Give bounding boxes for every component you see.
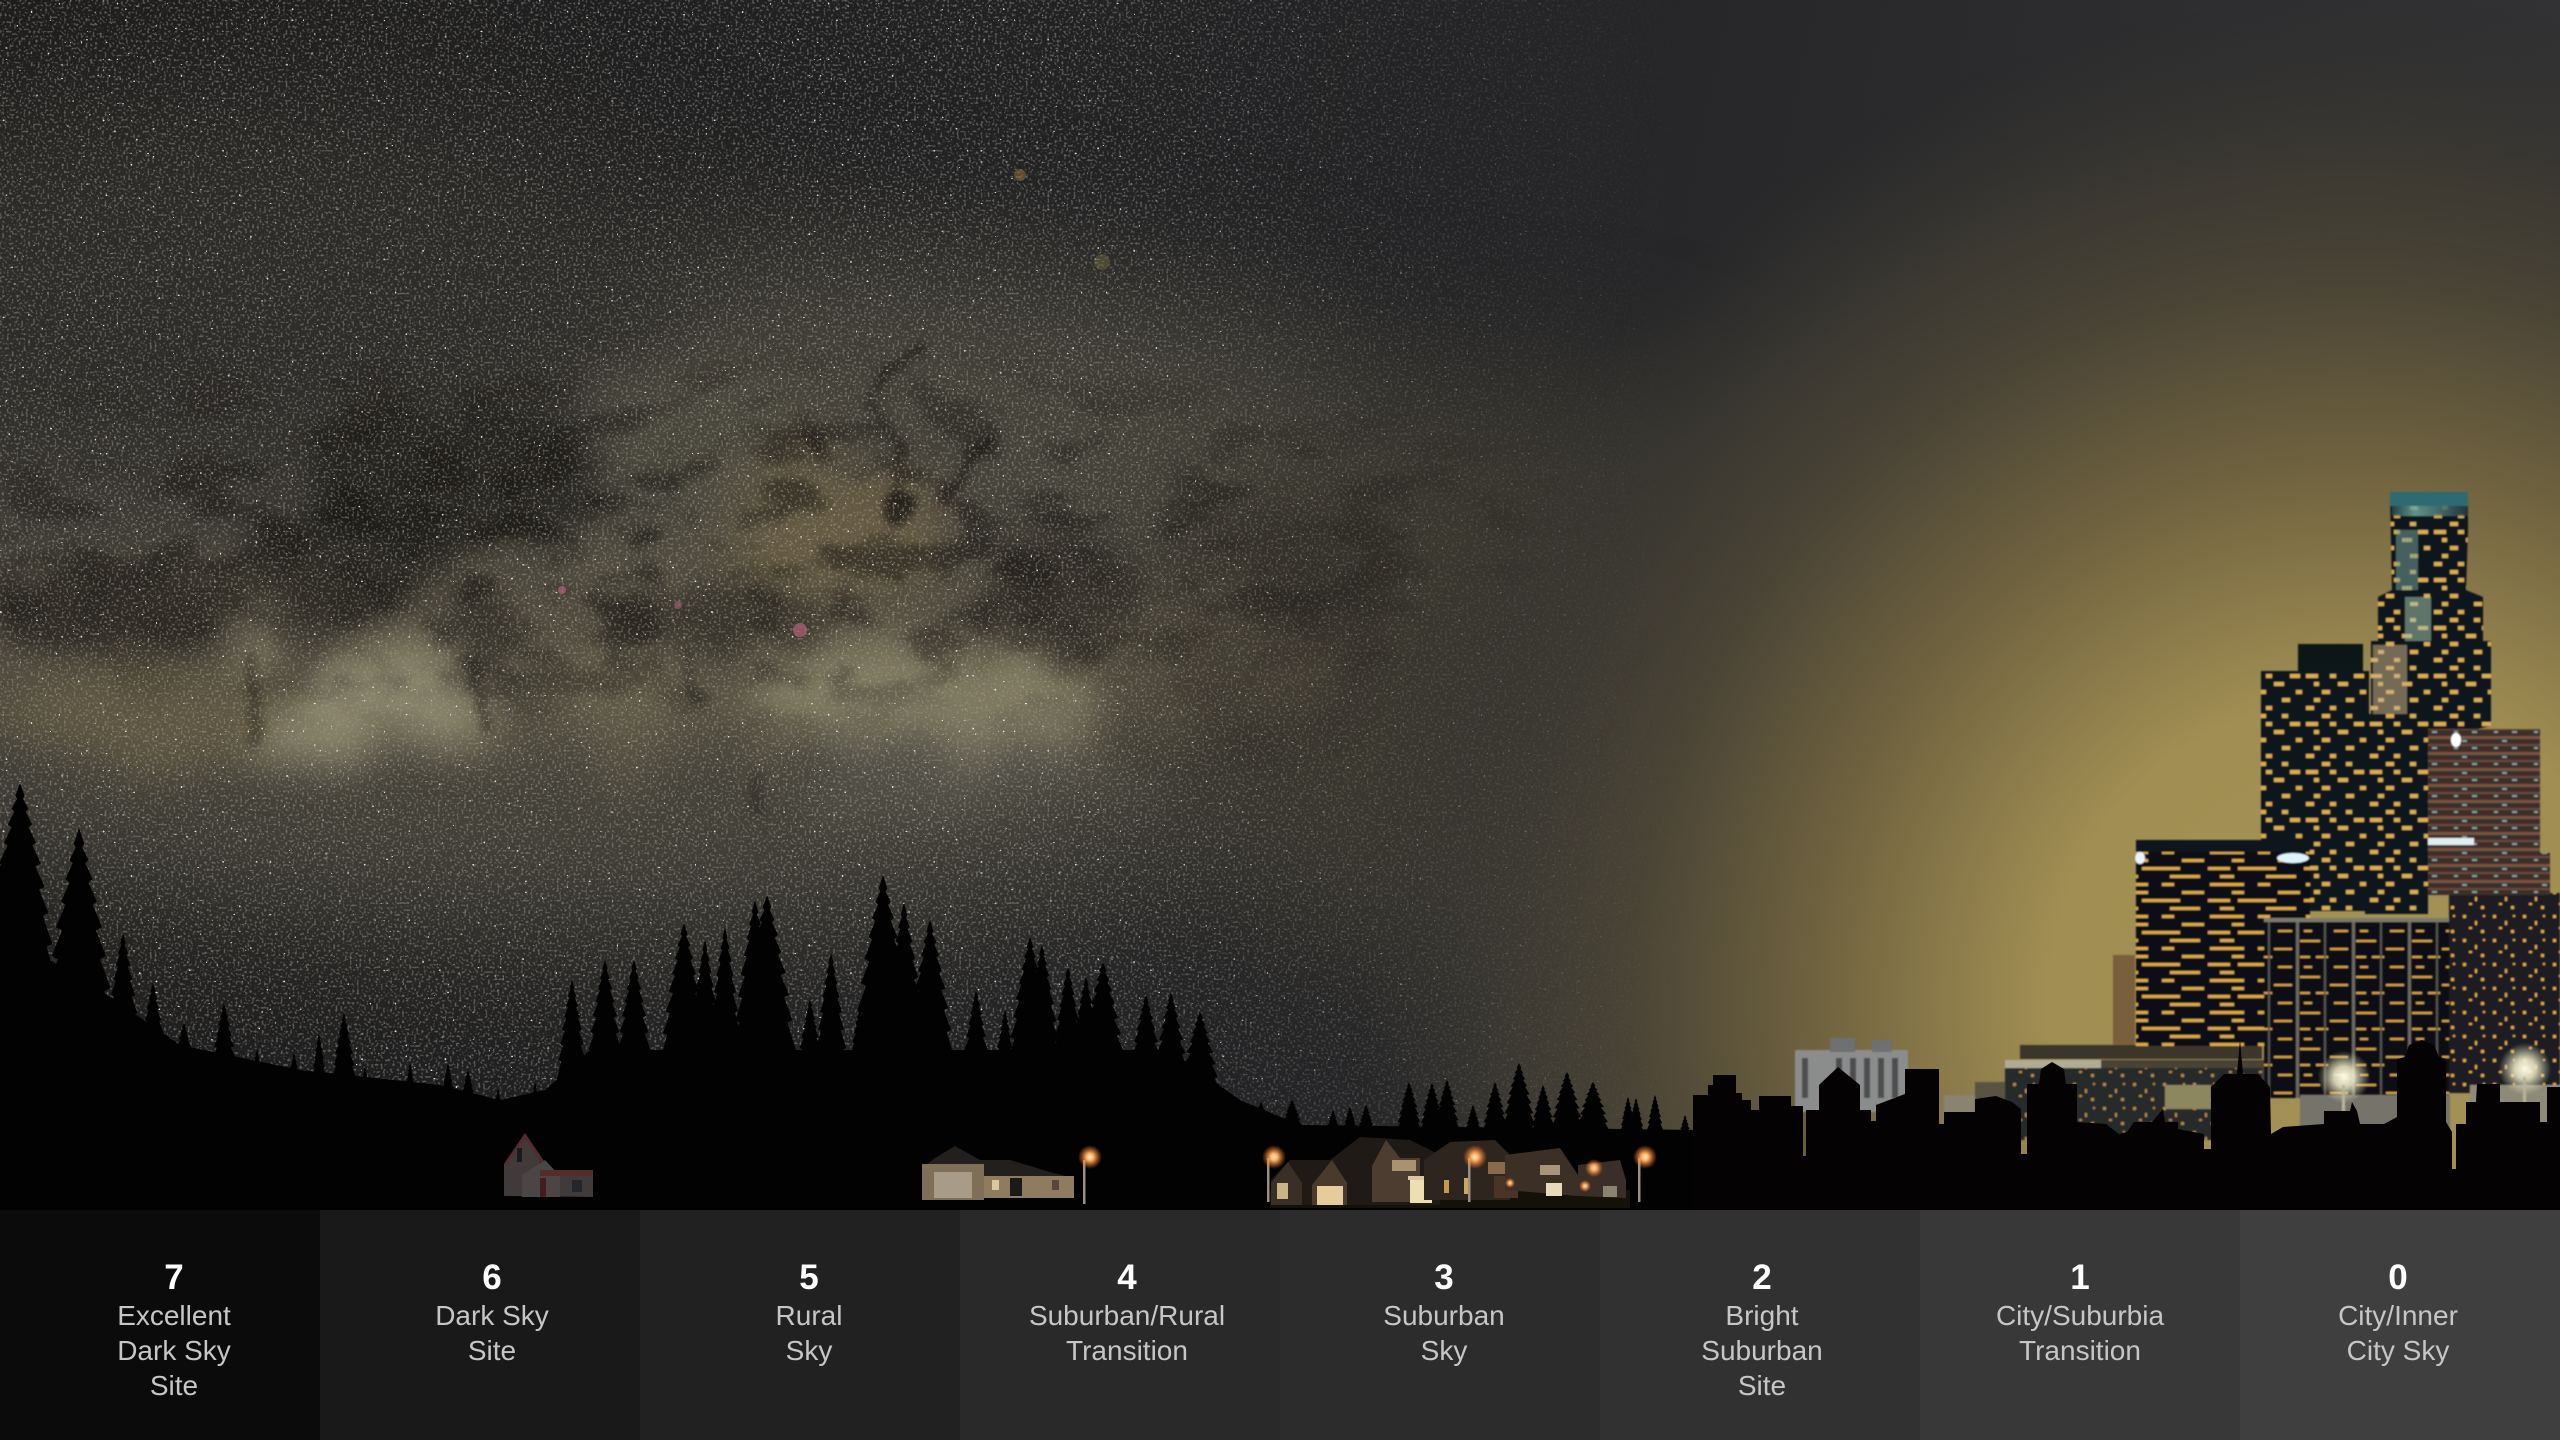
column: class 6 bbox=[320, 1210, 640, 1440]
column: class 4: Suburban/Rural bbox=[1029, 1300, 1225, 1331]
rural cottage bbox=[504, 1133, 593, 1197]
column: class 6: Site bbox=[468, 1335, 516, 1366]
column: class 1: City/Suburbia bbox=[1996, 1300, 2164, 1331]
column: class 0: City Sky bbox=[2347, 1335, 2449, 1366]
column: class 7: Excellent bbox=[117, 1300, 231, 1331]
large left building bbox=[2135, 840, 2310, 1046]
far office block bbox=[1795, 1038, 1908, 1112]
right dark building bbox=[2449, 893, 2560, 1093]
column: class 0: City/Inner bbox=[2338, 1300, 2458, 1331]
column: class 7: 7 bbox=[164, 1258, 184, 1297]
column: class 3: Suburban bbox=[1383, 1300, 1505, 1331]
dust lanes bbox=[0, 405, 1380, 750]
city street lights bbox=[2318, 1043, 2551, 1115]
column: class 0: 0 bbox=[2388, 1258, 2408, 1297]
city silhouette bbox=[1693, 1040, 2560, 1210]
column: class 3: 3 bbox=[1434, 1258, 1454, 1297]
column: class 6: Dark Sky bbox=[435, 1300, 549, 1331]
column: class 2: Site bbox=[1738, 1370, 1786, 1401]
milky way glow bbox=[0, 350, 1360, 820]
column: class 4: Transition bbox=[1066, 1335, 1188, 1366]
left tower bbox=[2261, 644, 2369, 911]
right brown building bbox=[2428, 729, 2550, 895]
column: class 0 bbox=[2240, 1210, 2560, 1440]
downtown skyscrapers bbox=[1795, 492, 2560, 1140]
star field bbox=[0, 0, 1660, 1127]
column: class 5: 5 bbox=[799, 1258, 819, 1297]
broad galactic haze bbox=[0, 100, 1880, 980]
column: class 2: Suburban bbox=[1701, 1335, 1823, 1366]
column: class 5: Rural bbox=[776, 1300, 842, 1331]
column: class 1 bbox=[1920, 1210, 2240, 1440]
column: class 1: 1 bbox=[2070, 1258, 2090, 1297]
single house with lamp bbox=[922, 1145, 1102, 1204]
column: class 7: Site bbox=[150, 1370, 198, 1401]
suburban houses with lamps bbox=[1262, 1137, 1657, 1208]
column: class 3: Sky bbox=[1421, 1335, 1467, 1366]
column: class 4 bbox=[960, 1210, 1280, 1440]
column: class 6: 6 bbox=[482, 1258, 502, 1297]
front grid building bbox=[2264, 918, 2560, 1135]
forest silhouette bbox=[0, 783, 1700, 1210]
column: class 2: 2 bbox=[1752, 1258, 1772, 1297]
column: class 1: Transition bbox=[2019, 1335, 2141, 1366]
mottled dust texture bbox=[4, 367, 1407, 726]
column: class 4: 4 bbox=[1117, 1258, 1137, 1297]
column: class 5 bbox=[640, 1210, 960, 1440]
column: class 5: Sky bbox=[786, 1335, 832, 1366]
low podium buildings bbox=[1944, 1045, 2265, 1140]
main tower bbox=[2371, 492, 2491, 740]
central tower bbox=[2365, 714, 2428, 914]
column: class 7: Dark Sky bbox=[117, 1335, 231, 1366]
column: class 3 bbox=[1280, 1210, 1600, 1440]
beige tower bbox=[2113, 955, 2135, 1045]
column: class 2: Bright bbox=[1725, 1300, 1799, 1331]
column: class 2 bbox=[1600, 1210, 1920, 1440]
panel: Bortle scale bar bbox=[0, 1210, 2560, 1440]
column: class 7 bbox=[0, 1210, 320, 1440]
fine dust filaments bbox=[250, 343, 992, 807]
